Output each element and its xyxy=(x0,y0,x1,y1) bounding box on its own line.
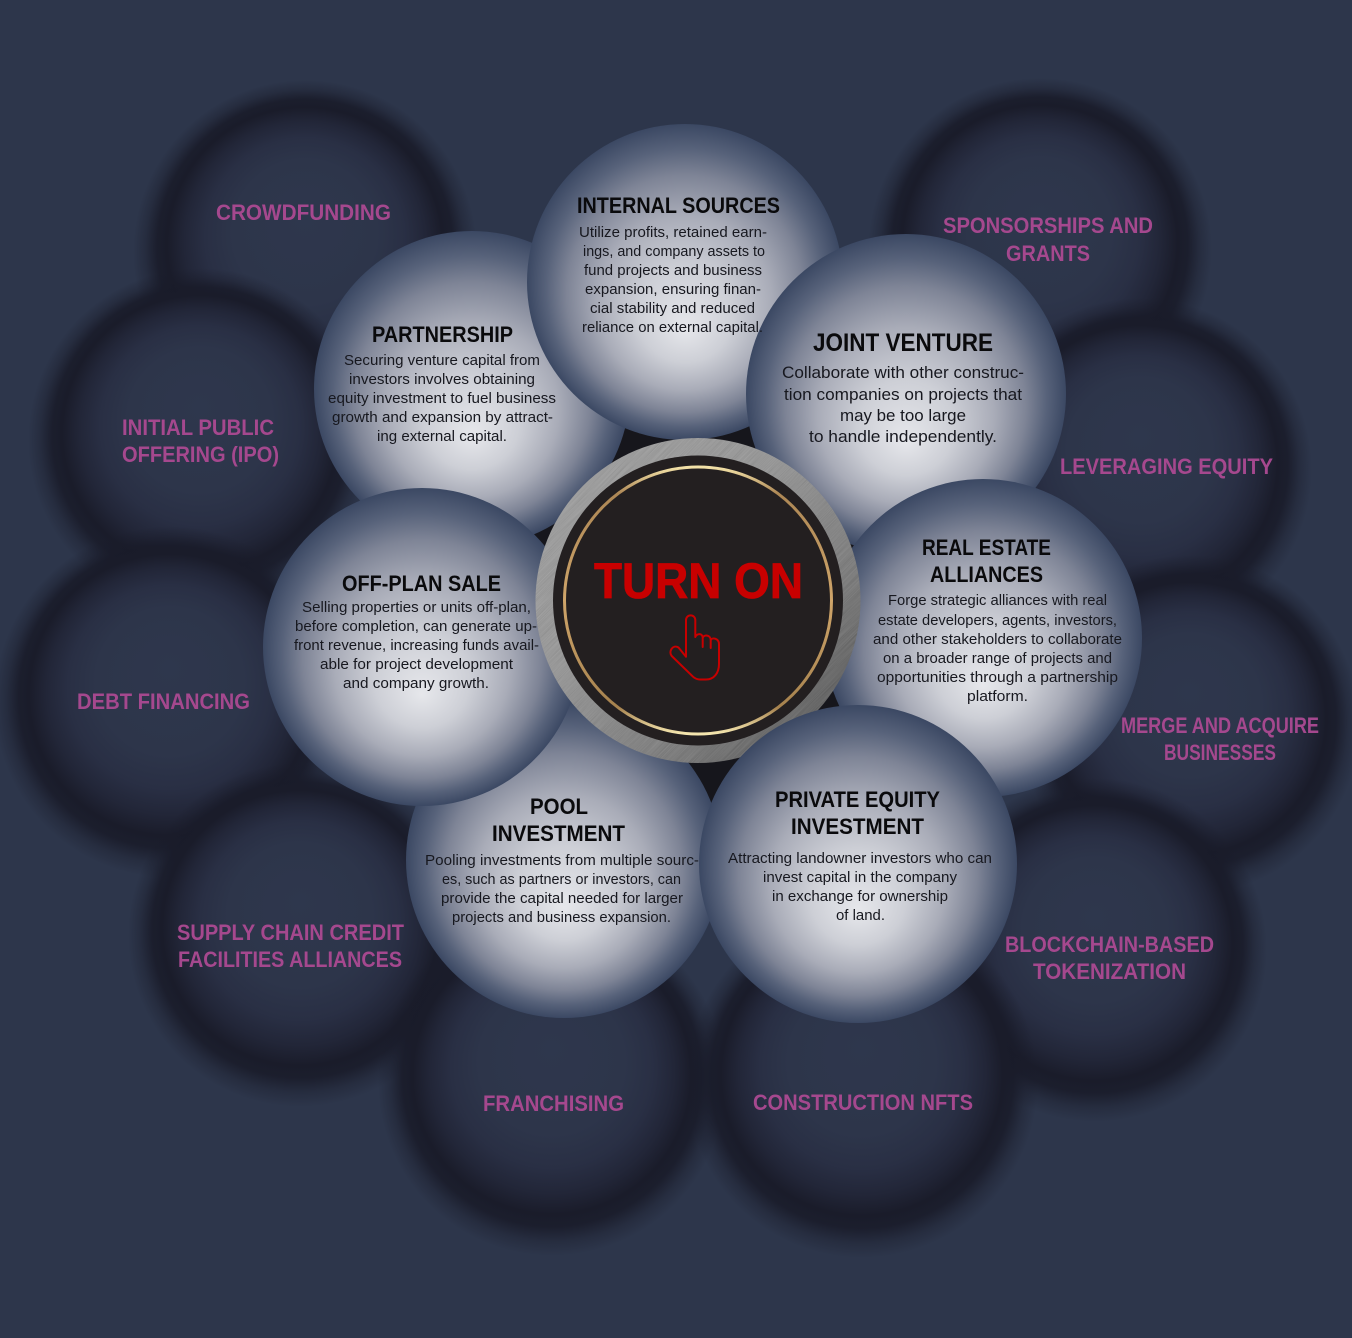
dark bubble: franchising xyxy=(378,908,726,1256)
sphere: private equity investment: PRIVATE EQUITY xyxy=(775,787,940,812)
dark bubble: sponsorships and grants xyxy=(868,78,1212,422)
sphere: partnership: ing external capital. xyxy=(377,428,507,445)
sphere: private equity investment: Attracting landowner investors who can xyxy=(728,850,992,867)
dark bubble: initial public offering: OFFERING (IPO) xyxy=(122,442,279,467)
sphere: pool investment: projects and business expansion. xyxy=(452,909,671,926)
sphere: real estate alliances: ALLIANCES xyxy=(930,562,1043,587)
dark bubble: construction NFTs: CONSTRUCTION NFTS xyxy=(753,1090,973,1115)
sphere: real estate alliances: on a broader range of projects and xyxy=(883,650,1112,667)
sphere: real estate alliances: Forge strategic alliances with real xyxy=(888,592,1107,609)
sphere: pool investment: Pooling investments from multiple sourc- xyxy=(425,852,699,869)
dark bubble: blockchain tokenization xyxy=(923,778,1267,1122)
dark bubble: initial public offering: INITIAL PUBLIC xyxy=(122,415,274,440)
sphere: pool investment: provide the capital needed for larger xyxy=(441,890,683,907)
turn on button xyxy=(468,371,928,830)
dark bubble: leveraging equity: LEVERAGING EQUITY xyxy=(1060,454,1273,479)
text: internal sources: Utilize profits, retained earn- xyxy=(579,224,767,241)
sphere: joint venture: may be too large xyxy=(840,406,966,425)
icon: pointing hand xyxy=(670,615,719,680)
dark bubble: crowdfunding xyxy=(133,80,477,424)
dark bubble: supply chain credit: FACILITIES ALLIANCES xyxy=(178,947,402,972)
sphere: internal sources xyxy=(527,124,843,440)
dark bubble: crowdfunding: CROWDFUNDING xyxy=(216,200,391,225)
sphere: pool investment: es, such as partners or investors, can xyxy=(442,871,681,888)
sphere: partnership: PARTNERSHIP xyxy=(372,322,513,347)
sphere: partnership: equity investment to fuel business xyxy=(328,390,556,407)
dark bubble: leveraging equity xyxy=(968,298,1312,642)
sphere: partnership xyxy=(314,231,630,547)
dark bubble: initial public offering xyxy=(28,268,372,612)
text: internal sources: cial stability and reduced xyxy=(590,300,755,317)
sphere: joint venture: tion companies on projects that xyxy=(784,385,1022,404)
dark bubble: blockchain tokenization: TOKENIZATION xyxy=(1033,959,1186,984)
sphere: real estate alliances: REAL ESTATE xyxy=(922,535,1051,560)
dark bubble: merge and acquire xyxy=(1020,555,1352,895)
sphere: off-plan sale: OFF-PLAN SALE xyxy=(342,571,501,596)
text: internal sources: reliance on external capital. xyxy=(582,319,763,336)
sphere: real estate alliances: platform. xyxy=(967,688,1028,705)
sphere: off-plan sale: before completion, can generate up- xyxy=(295,618,537,635)
dark bubble: merge and acquire: BUSINESSES xyxy=(1164,740,1276,765)
sphere: pool investment xyxy=(406,702,722,1018)
sphere: private equity investment: invest capital in the company xyxy=(763,869,957,886)
text: internal sources: fund projects and business xyxy=(584,262,762,279)
dark bubble: blockchain tokenization: BLOCKCHAIN-BASED xyxy=(1005,932,1214,957)
dark bubble: sponsorships and grants: GRANTS xyxy=(1006,241,1090,266)
button label: TURN ON xyxy=(594,553,803,609)
sphere: off-plan sale: front revenue, increasing funds avail- xyxy=(294,637,539,654)
dark bubble: supply chain credit: SUPPLY CHAIN CREDIT xyxy=(177,920,405,945)
text: internal sources: ings, and company assets to xyxy=(583,243,765,260)
sphere: real estate alliances: opportunities through a partnership xyxy=(877,669,1118,686)
text: internal sources: expansion, ensuring finan- xyxy=(585,281,761,298)
dark bubble: supply chain credit xyxy=(128,763,472,1107)
sphere: pool investment: INVESTMENT xyxy=(492,821,626,846)
dark bubble: debt financing: DEBT FINANCING xyxy=(77,689,250,714)
sphere: private equity investment: in exchange for ownership xyxy=(772,888,948,905)
central dark backing xyxy=(400,300,980,880)
text: internal sources: INTERNAL SOURCES xyxy=(577,193,780,218)
sphere: joint venture xyxy=(746,234,1066,554)
sphere: private equity investment: of land. xyxy=(836,907,885,924)
dark bubble: construction NFTs xyxy=(686,906,1038,1258)
dark bubble: sponsorships and grants: SPONSORSHIPS AND xyxy=(943,213,1153,238)
sphere: partnership: Securing venture capital from xyxy=(344,352,540,369)
sphere: off-plan sale: and company growth. xyxy=(343,675,489,692)
text: internal sources xyxy=(577,193,780,336)
sphere: real estate alliances: and other stakeholders to collaborate xyxy=(873,631,1122,648)
sphere: joint venture: Collaborate with other construc- xyxy=(782,363,1024,382)
dark bubble: debt financing xyxy=(0,526,346,878)
sphere: private equity investment: INVESTMENT xyxy=(791,814,925,839)
sphere: off-plan sale: Selling properties or units off-plan, xyxy=(302,599,531,616)
sphere: real estate alliances: estate developers, agents, investors, xyxy=(878,612,1117,629)
sphere: pool investment: POOL xyxy=(530,794,588,819)
sphere: real estate alliances xyxy=(824,479,1142,797)
sphere: off-plan sale: able for project development xyxy=(320,656,514,673)
sphere: joint venture: JOINT VENTURE xyxy=(813,329,993,357)
dark bubble: franchising: FRANCHISING xyxy=(483,1091,624,1116)
sphere: partnership: growth and expansion by attract- xyxy=(332,409,553,426)
sphere: joint venture: to handle independently. xyxy=(809,427,997,446)
sphere: off-plan sale xyxy=(263,488,581,806)
sphere: partnership: investors involves obtaining xyxy=(349,371,535,388)
sphere: private equity investment xyxy=(699,705,1017,1023)
